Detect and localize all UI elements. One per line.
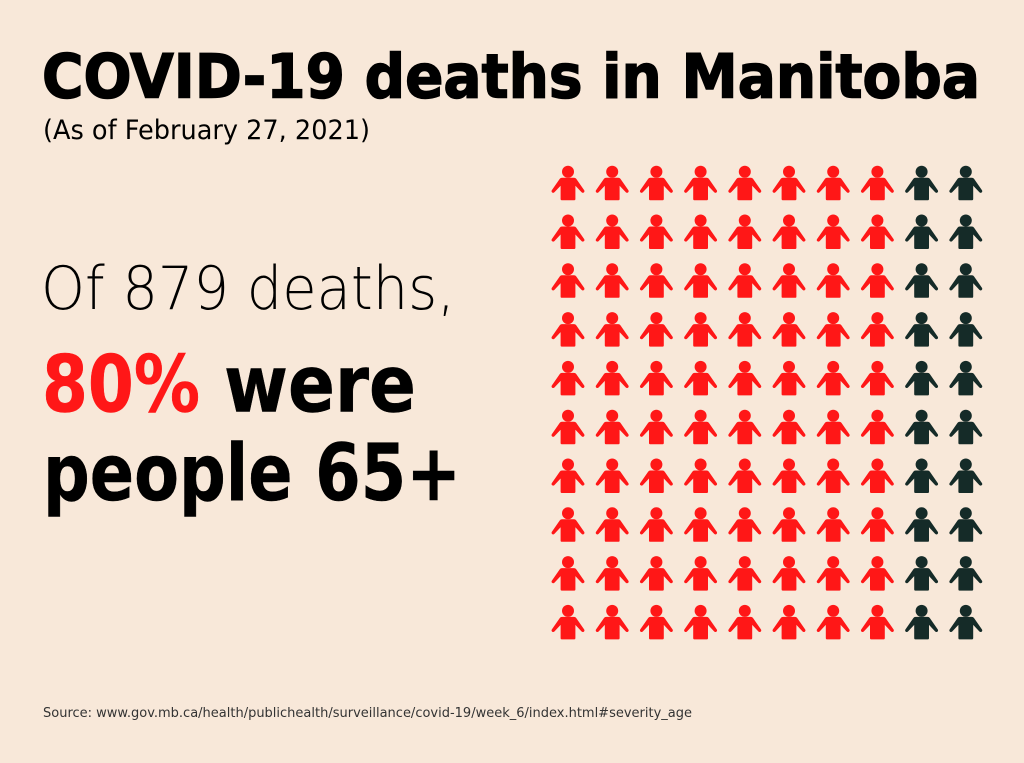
highlight: 80%: 80%: [42, 340, 200, 430]
statement: share of deaths aged 65+: [42, 340, 461, 519]
source note: Source: www.gov.mb.ca/health/publichealth/surveillance/covid-19/week_6/index.html#severity_age: [43, 705, 692, 721]
title: COVID-19 deaths in Manitoba: [42, 42, 980, 112]
pictogram: 100 people, 80 red and 20 dark: [552, 166, 982, 639]
text: were: were: [224, 340, 416, 430]
text: people 65+: people 65+: [43, 429, 461, 519]
statement: total deaths: Of 879 deaths,: [41, 254, 455, 324]
subtitle: date: (As of February 27, 2021): [43, 115, 370, 146]
